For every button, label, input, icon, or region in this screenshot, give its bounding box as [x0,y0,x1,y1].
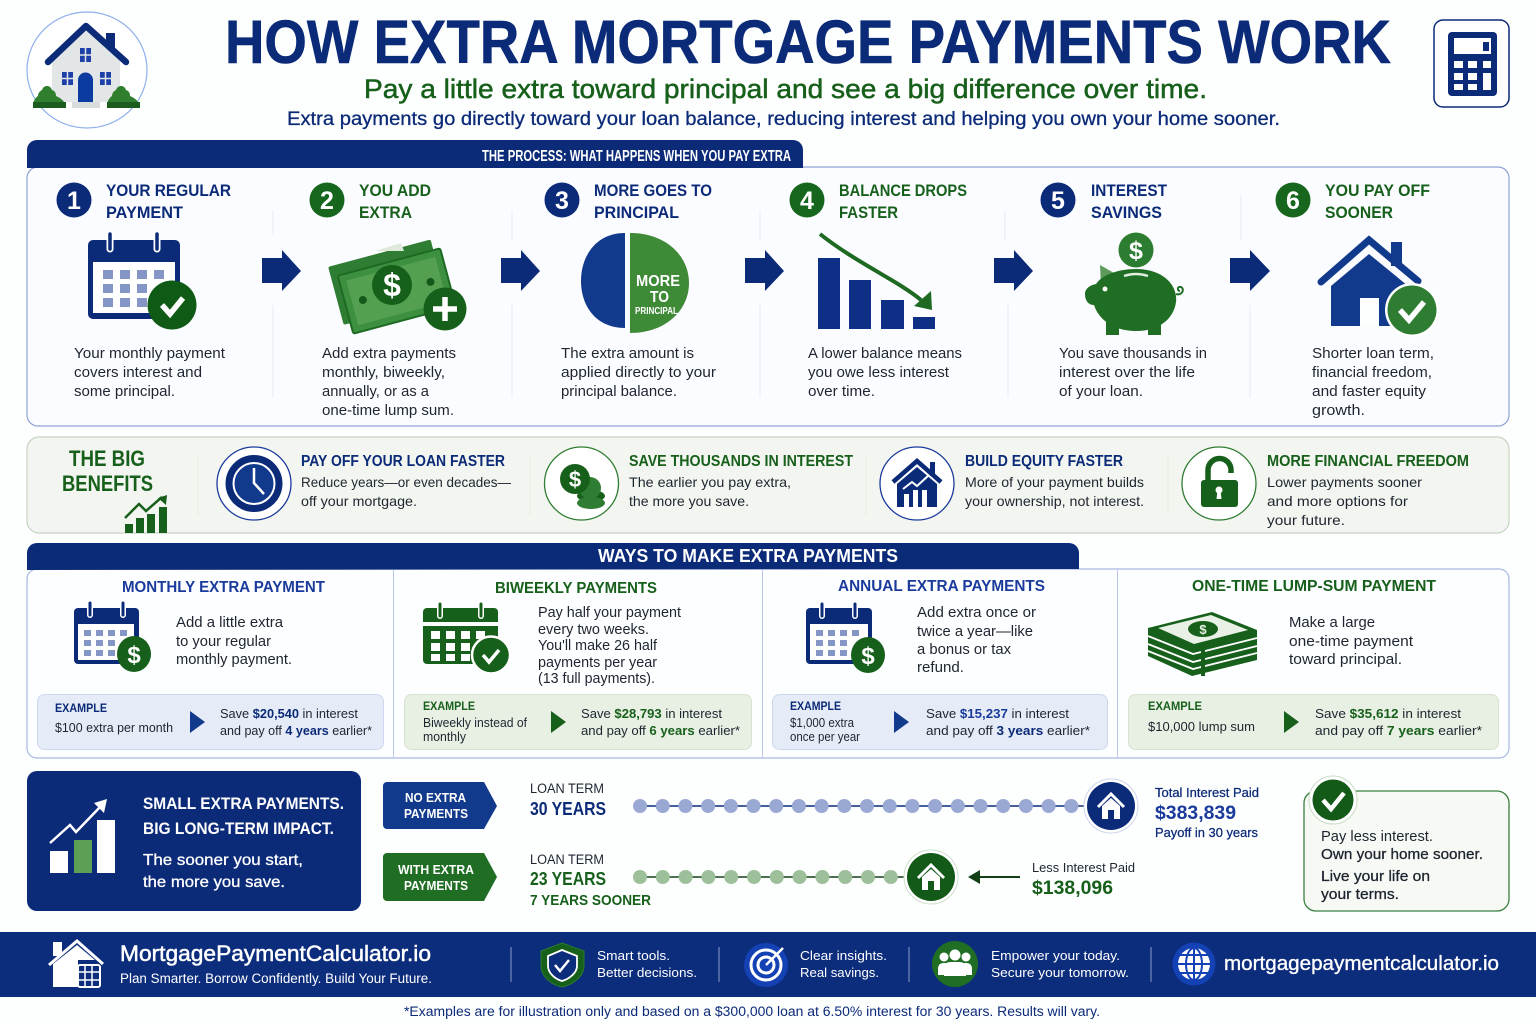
icon: cash plus: $ [383,267,401,303]
example box: EXAMPLE [790,699,841,713]
brand: Plan Smarter. Borrow Confidently. Build Your Future. [120,971,432,986]
card: annual extra payments: twice a year—like [917,624,1033,640]
loan term 23 years: 7 YEARS SOONER [530,892,651,909]
panel: impact statement: the more you save. [143,874,285,891]
step text [74,345,226,400]
process tab heading: THE PROCESS: WHAT HAPPENS WHEN YOU PAY EXTRA [482,148,791,165]
benefit: financial freedom: MORE FINANCIAL FREEDOM [1267,453,1469,470]
icon: coins [544,447,618,520]
step heading [1091,181,1168,222]
arrow [994,250,1033,291]
step text: applied directly to your [561,364,716,381]
example box: Biweekly instead of [423,716,527,730]
step text [322,345,456,419]
step text: of your loan. [1059,383,1143,400]
step heading: EXTRA [359,203,412,222]
benefit: pay off loan faster [217,447,511,520]
step 1 [56,181,231,400]
benefit: save thousands: The earlier you pay extra, [629,474,791,490]
example box: $100 extra per month [55,721,173,735]
icon: cash stack [1148,612,1257,676]
step text: growth. [1312,402,1365,419]
icon: piggy bank: $ [1129,237,1143,265]
loan term 23 years: LOAN TERM [530,852,604,867]
arrow [745,250,784,291]
step 4 [790,181,967,400]
tag: with extra payments [383,853,497,901]
chart: principal pie: PRINCIPAL [635,305,678,317]
icon: shield [541,943,584,987]
example box: $1,000 extra [790,716,854,730]
step text [561,345,716,400]
benefit: save thousands: the more you save. [629,493,749,509]
icon: calendar dollar [806,604,885,673]
arrow [262,250,301,291]
benefit: save thousands: SAVE THOUSANDS IN INTEREST [629,453,853,470]
step heading [839,181,967,222]
step text: financial freedom, [1312,364,1432,381]
chart: principal pie: TO [650,289,669,306]
card: monthly extra payment: MONTHLY EXTRA PAYMENT [122,579,325,596]
example box: Save $15,237 in interest [926,707,1070,721]
step heading: YOUR REGULAR [106,181,231,200]
card: one-time lump-sum payment [1128,578,1498,750]
step number 5: 5 [1051,187,1065,215]
card: monthly extra payment: Add a little extra [176,615,284,631]
example box: and pay off 6 years earlier* [581,724,740,738]
step heading: SAVINGS [1091,203,1162,222]
loan term 23 years [530,852,651,909]
card: biweekly payments: (13 full payments). [538,671,655,687]
callout: pay less interest: Live your life on [1321,869,1430,885]
icon: footer house [49,941,103,987]
timeline 23 years [633,850,958,904]
card: biweekly payments [404,580,752,750]
less interest paid [1032,861,1135,899]
step text: The extra amount is [561,345,694,362]
step number 6 [1276,182,1310,218]
benefits heading [62,446,153,496]
subtitle: Pay a little extra toward principal and see a big difference over time. [364,74,1207,104]
example box: Save $20,540 in interest [220,707,359,721]
card: one-time lump-sum payment: one-time payment [1289,634,1413,650]
step heading: YOU ADD [359,181,431,200]
card: monthly extra payment: to your regular [176,634,271,650]
less interest paid: $138,096 [1032,877,1113,899]
step heading [1325,181,1430,222]
icon: cash plus [328,238,466,335]
icon: coins: $ [569,467,581,492]
benefit: financial freedom: and more options for [1267,493,1408,509]
step number 2 [310,182,344,218]
footer item: empower [932,941,1129,987]
panel: the process [27,140,1509,426]
icon: clock [217,447,291,520]
timeline 30 years [633,779,1138,833]
step text: Add extra payments [322,345,456,362]
step heading: BALANCE DROPS [839,181,967,200]
card: biweekly payments: You'll make 26 half [538,638,658,654]
example box: Save $35,612 in interest [1315,707,1462,721]
footer item: website [1172,942,1499,986]
panel: the big benefits [27,437,1509,533]
example box: $10,000 lump sum [1148,720,1255,734]
card: one-time lump-sum payment: Make a large [1289,615,1375,631]
footer band [0,932,1536,997]
footer item: clear insights: Clear insights. [800,948,887,963]
step 5 [1040,181,1207,400]
step number 2: 2 [320,187,334,215]
loan term 30 years [530,781,606,819]
ways tab heading: WAYS TO MAKE EXTRA PAYMENTS [598,546,898,566]
footer item: clear insights: Real savings. [800,965,879,980]
callout: pay less interest: Pay less interest. [1321,829,1433,845]
arrow [1230,250,1270,291]
icon: piggy bank [1085,232,1183,335]
callout: pay less interest: Own your home sooner. [1321,847,1483,863]
step text: over time. [808,383,875,400]
card: biweekly payments: BIWEEKLY PAYMENTS [495,580,657,597]
ways tab heading [27,543,1079,570]
step 3 [544,181,716,400]
total interest paid [1155,786,1259,840]
benefit: financial freedom: your future. [1267,512,1345,528]
footer item: empower: Empower your today. [991,948,1120,963]
icon: house logo [27,12,147,128]
step number 3: 3 [555,187,569,215]
panel: impact statement: BIG LONG-TERM IMPACT. [143,820,334,838]
process tab heading [27,140,803,168]
tag: with extra payments: WITH EXTRA [398,863,474,877]
step text: one-time lump sum. [322,402,454,419]
footer item: website: mortgagepaymentcalculator.io [1224,952,1499,975]
benefit: build equity [880,447,1144,520]
example box: and pay off 7 years earlier* [1315,724,1482,738]
step text: and faster equity [1312,383,1427,400]
step number 5 [1040,182,1076,218]
panel: impact statement [27,771,361,911]
example box: and pay off 3 years earlier* [926,724,1090,738]
total interest paid: Payoff in 30 years [1155,826,1258,840]
step text: principal balance. [561,383,677,400]
example box [1128,694,1498,750]
example box: once per year [790,730,860,744]
step heading [594,181,712,222]
example box: EXAMPLE [1148,699,1202,713]
arrow [501,250,540,291]
chart: principal pie: MORE [636,273,680,290]
benefit: pay off loan faster: PAY OFF YOUR LOAN FASTER [301,453,505,470]
benefit: build equity: your ownership, not interest. [965,493,1144,509]
step text [808,345,962,400]
chart: falling balance [818,234,935,329]
card: biweekly payments: payments per year [538,655,657,671]
card: one-time lump-sum payment: ONE-TIME LUMP-SUM PAYMENT [1192,578,1436,595]
title: HOW EXTRA MORTGAGE PAYMENTS WORK [225,8,1391,76]
card: annual extra payments: ANNUAL EXTRA PAYMENTS [838,578,1045,595]
icon: calendar dollar: $ [861,643,875,670]
icon: globe [1172,942,1216,986]
card: biweekly payments: every two weeks. [538,622,649,638]
tag: no extra payments: NO EXTRA [405,791,466,805]
panel: impact statement: SMALL EXTRA PAYMENTS. [143,795,344,813]
card: annual extra payments: a bonus or tax [917,642,1012,658]
benefit: financial freedom: Lower payments sooner [1267,474,1422,490]
footer item: empower: Secure your tomorrow. [991,965,1129,980]
step heading [106,181,231,222]
benefit: save thousands [544,447,853,520]
step text: A lower balance means [808,345,962,362]
chart: principal pie [581,233,689,333]
step number 3 [544,182,580,218]
icon: growth chart [125,495,167,533]
benefit: pay off loan faster: Reduce years—or even decades— [301,474,511,490]
card: annual extra payments: Add extra once or [917,605,1036,621]
step text: monthly, biweekly, [322,364,445,381]
example box [38,694,384,750]
icon: green calendar [423,604,510,674]
arrow: less interest [968,870,1020,884]
benefit: build equity: More of your payment builds [965,474,1144,490]
step heading: INTEREST [1091,181,1168,200]
step heading: YOU PAY OFF [1325,181,1430,200]
icon: calendar check [88,234,196,330]
tag: no extra payments [383,782,497,829]
icon: target [744,943,788,987]
total interest paid: Total Interest Paid [1155,786,1259,800]
footer item: smart tools: Better decisions. [597,965,697,980]
step number 1 [56,182,92,218]
example box [772,694,1108,750]
step heading: FASTER [839,203,898,222]
intro sentence: Extra payments go directly toward your loan balance, reducing interest and helping you own your home sooner. [287,108,1280,130]
benefit: financial freedom [1182,447,1469,528]
icon: calendar dollar: $ [127,642,141,669]
less interest paid: Less Interest Paid [1032,861,1135,875]
icon: house chart [880,447,954,520]
icon: house with check [1321,240,1439,337]
step text: Shorter loan term, [1312,345,1434,362]
step heading: SOONER [1325,203,1393,222]
example box: EXAMPLE [423,699,475,713]
step number 6: 6 [1286,187,1300,215]
icon: calendar dollar [74,603,151,672]
card: one-time lump-sum payment: toward principal. [1289,652,1402,668]
step heading: MORE GOES TO [594,181,712,200]
icon: open lock [1182,447,1256,520]
benefits heading: THE BIG [69,446,145,471]
step text: you owe less interest [808,364,950,381]
brand: MortgagePaymentCalculator.io [120,941,431,966]
footer item: clear insights [744,943,887,987]
icon: calculator [1434,20,1509,107]
step number 4: 4 [800,187,814,215]
step heading: PAYMENT [106,203,184,222]
footer item: smart tools [541,943,697,987]
card: annual extra payments: refund. [917,660,964,676]
step text [1059,345,1207,400]
comparison: with extra payments [383,850,1135,909]
step text [1312,345,1434,419]
total interest paid: $383,839 [1155,802,1236,824]
step number 4 [790,182,824,218]
step 2 [310,181,466,419]
tag: with extra payments: PAYMENTS [404,879,468,893]
tag: no extra payments: PAYMENTS [404,807,468,821]
step text: You save thousands in [1059,345,1207,362]
callout: pay less interest [1304,776,1509,911]
icon: rising bars and arrow [50,799,115,873]
callout: pay less interest: your terms. [1321,887,1399,903]
step text: interest over the life [1059,364,1195,381]
benefits heading: BENEFITS [62,471,153,496]
footnote: *Examples are for illustration only and based on a $300,000 loan at 6.50% interest for 30 years. Results will vary. [404,1004,1100,1019]
footer item: smart tools: Smart tools. [597,948,670,963]
comparison: no extra payments [383,779,1259,840]
step 6 [1276,181,1439,419]
step text: Your monthly payment [74,345,226,362]
step text: some principal. [74,383,175,400]
step heading: PRINCIPAL [594,203,679,222]
example box: Save $28,793 in interest [581,707,723,721]
card: annual extra payments [772,578,1108,750]
example box: and pay off 4 years earlier* [220,724,372,738]
brand [120,941,432,986]
example box: monthly [423,730,467,744]
icon: people [932,941,978,987]
loan term 30 years: LOAN TERM [530,781,604,796]
icon: cash stack: $ [1199,622,1207,637]
step number 1: 1 [67,187,81,215]
benefit: build equity: BUILD EQUITY FASTER [965,453,1123,470]
step text: annually, or as a [322,383,430,400]
benefit: pay off loan faster: off your mortgage. [301,493,417,509]
panel: ways to make extra payments [27,543,1509,758]
loan term 30 years: 30 YEARS [530,799,606,819]
card: biweekly payments: Pay half your payment [538,605,681,621]
loan term 23 years: 23 YEARS [530,869,606,889]
step heading [359,181,431,222]
example box: EXAMPLE [55,701,107,715]
card: monthly extra payment: monthly payment. [176,652,292,668]
step text: covers interest and [74,364,202,381]
panel: impact statement: The sooner you start, [143,852,303,869]
card: monthly extra payment [38,579,384,750]
example box [404,694,752,750]
